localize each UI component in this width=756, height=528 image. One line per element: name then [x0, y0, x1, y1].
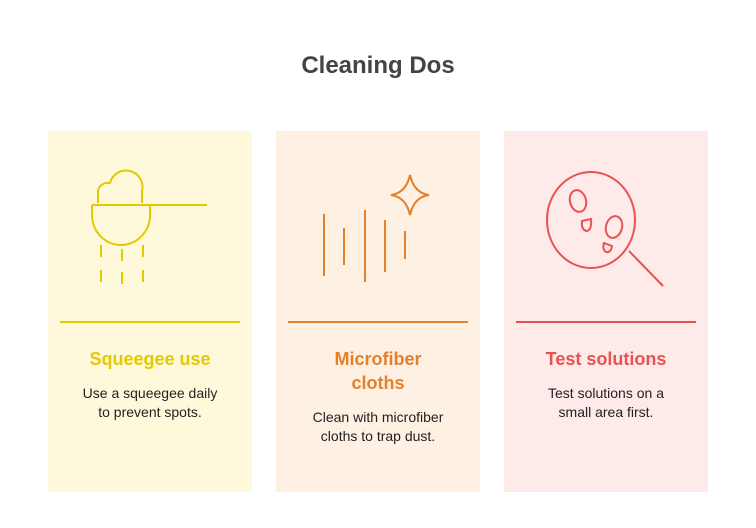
rule — [516, 321, 696, 323]
heading: Test solutions — [546, 349, 666, 369]
panel: test — [504, 131, 708, 492]
panel: squeegee — [48, 131, 252, 492]
text: Clean with microfiber — [313, 409, 443, 425]
icon: lines and sparkle — [323, 174, 430, 282]
heading: Squeegee use — [89, 349, 211, 369]
heading — [334, 349, 422, 393]
text: cloths to trap dust. — [321, 428, 435, 444]
heading: cloths — [351, 373, 404, 393]
icon: squeegee — [91, 170, 207, 284]
title: Cleaning Dos — [301, 52, 455, 79]
text: small area first. — [559, 404, 653, 420]
text: Test solutions on a — [548, 385, 664, 401]
panel: microfiber — [276, 131, 480, 492]
heading: Microfiber — [334, 349, 422, 369]
icon: magnifier — [546, 171, 664, 287]
text: to prevent spots. — [98, 404, 202, 420]
text — [313, 409, 444, 444]
text: Use a squeegee daily — [83, 385, 217, 401]
rule — [60, 321, 240, 323]
text — [548, 385, 664, 420]
rule — [288, 321, 468, 323]
text — [83, 385, 218, 420]
